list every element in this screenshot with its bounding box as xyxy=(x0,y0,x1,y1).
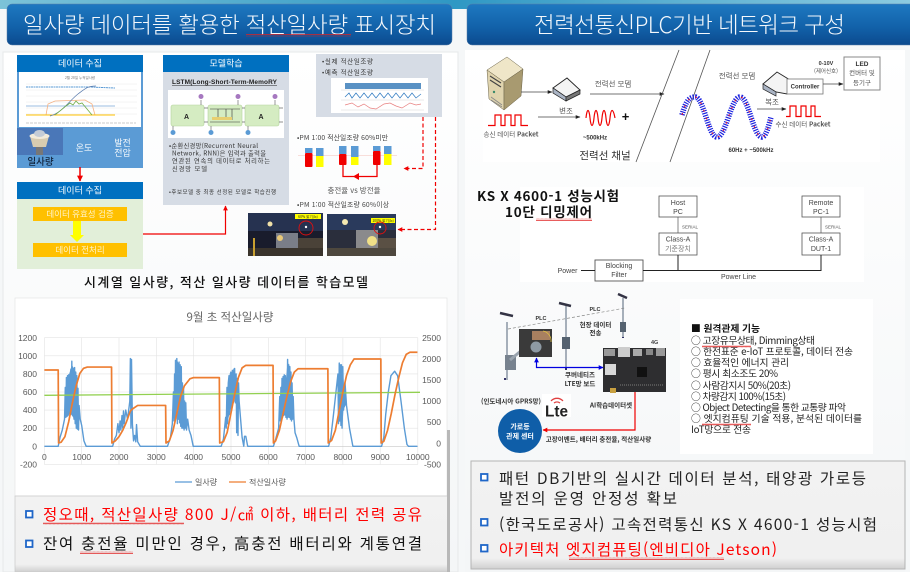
label: generation voltage: 발전 xyxy=(114,136,131,149)
label: power line: Power Line xyxy=(721,274,756,281)
x axis labels: 10000 xyxy=(406,452,430,462)
photo: controller box xyxy=(519,329,552,357)
series: irradiance dense band xyxy=(66,360,346,428)
label: kubernetes board: 쿠버네티즈 xyxy=(565,369,595,379)
icon: edge board xyxy=(603,347,666,393)
chart: early September cumulative irradiance xyxy=(15,298,447,496)
icon: receiver modem xyxy=(763,72,790,96)
title: right xyxy=(467,4,910,45)
left axis labels: 1000 xyxy=(18,351,37,361)
left axis labels: 1200 xyxy=(18,333,37,343)
box: blocking filter xyxy=(595,260,643,281)
box: controller xyxy=(787,79,823,94)
label: control signal: 0-10V xyxy=(819,61,834,67)
left axis labels: 0 xyxy=(32,442,37,452)
panel: actual and predicted: •예측 적산일조량 xyxy=(322,66,373,76)
photo: 60 percent brightness xyxy=(248,213,323,256)
label: receiver modem: 전력선 모뎀 xyxy=(719,70,755,82)
signal: send packet xyxy=(488,115,528,126)
box: reference device xyxy=(659,233,697,255)
box: device under test: Class-A xyxy=(809,236,834,244)
heading: performance test: KS X 4600-1 성능시험 xyxy=(477,185,619,205)
heading: performance test: 10단 디밍제어 xyxy=(505,201,592,221)
x axis labels: 9000 xyxy=(371,452,390,462)
right axis labels: 0 xyxy=(436,438,441,448)
box: remote pc: Remote xyxy=(809,200,833,207)
x axis labels: 5000 xyxy=(222,452,241,462)
legend xyxy=(175,477,286,488)
right axis labels: 2500 xyxy=(422,333,441,343)
label: send packet: 송신 데이터 Packet xyxy=(483,128,539,138)
x axis labels: 7000 xyxy=(296,452,315,462)
power line xyxy=(581,255,821,270)
panel: remote control functions: ○ 한전표준 e-IoT 프로토콜, 데이터 전송 xyxy=(691,344,853,358)
label: solar irradiance: 일사량 xyxy=(27,154,54,168)
diagram: PLC signal flow xyxy=(483,50,880,163)
bullet: realtime analysis: 패턴 DB기반의 실시간 데이터 분석, 태양광 가로등 xyxy=(499,467,866,489)
panel: model training: 모델학습 xyxy=(209,56,243,70)
x axis labels: 0 xyxy=(42,452,47,462)
left axis labels: 800 xyxy=(23,369,37,379)
labels: PLC links: PLC xyxy=(536,316,547,322)
right axis labels: 500 xyxy=(427,417,441,427)
x axis labels: 6000 xyxy=(259,452,278,462)
icon: server xyxy=(487,57,523,110)
label: events data: 고장이벤트, 배터리 충전율, 적산일사량 xyxy=(546,434,651,444)
box: LED driver: 등기구 xyxy=(853,77,871,87)
label: kubernetes board: LTE망 보드 xyxy=(565,378,595,388)
panel: remote control functions xyxy=(680,299,873,454)
text: RNN description: Network, RNN)은 입력과 출력을 xyxy=(172,148,266,158)
arrow: server to modem xyxy=(521,91,552,93)
icon: LTE logo: Lte xyxy=(545,404,568,420)
left axis labels xyxy=(18,333,37,470)
photo: 100 percent brightness: 100% 밝기(lx) xyxy=(372,218,394,224)
signal: receive packet xyxy=(786,106,821,116)
panel: remote control functions: ○ 엣지컴퓨팅 기술 적용, 분석된 데이터를 xyxy=(691,411,862,425)
label: power: Power xyxy=(558,268,578,275)
x axis labels: 3000 xyxy=(147,452,166,462)
box: reference device: Class-A xyxy=(666,236,691,244)
text: candidate model note: •후보모델 중 최종 선정된 모델로 학습진행 xyxy=(169,188,276,196)
panel: remote control functions: ○ 평시 최소조도 20% xyxy=(691,366,778,380)
icon: pyranometer sensor xyxy=(17,128,63,155)
bullet: low irradiance: 정오때, 적산일사량 800 J/㎠ 이하, 배터리 전력 공유 xyxy=(43,503,422,525)
panel: actual and predicted: •실제 적산일조량 xyxy=(322,56,373,66)
box: host pc: Host xyxy=(671,200,685,207)
label: sender modem: 전력선 모뎀 xyxy=(595,78,631,90)
label: powerline channel: 전력선 채널 xyxy=(579,148,631,163)
label: combined frequency: 60Hz + ~500kHz xyxy=(728,148,774,154)
series: cumulative irradiance xyxy=(44,352,417,443)
panel: model training xyxy=(163,55,289,205)
labels: PLC links xyxy=(536,307,611,337)
panel: data preprocessing: 데이터 수집 xyxy=(58,184,102,196)
photo: 60 percent brightness: 60% 밝기(lx) xyxy=(298,214,318,220)
label: control signal: (제어신호) xyxy=(814,67,838,75)
channel lines xyxy=(636,50,710,162)
right axis labels: -500 xyxy=(424,460,441,470)
label: AI dataset: AI학습데이터셋 xyxy=(589,400,632,410)
bullet: realtime analysis xyxy=(481,467,866,509)
left axis labels: 600 xyxy=(23,387,37,397)
box: data validation: 데이터 유효성 검증 xyxy=(46,208,114,220)
label: receive packet: 수신 데이터 Packet xyxy=(775,118,831,128)
label: kubernetes board xyxy=(565,369,595,388)
box: LED driver: LED xyxy=(856,61,869,68)
chart: daily data: 2월 28일 누적일사량 xyxy=(65,75,96,81)
serial links xyxy=(678,217,842,233)
panel: remote control functions: IoT망으로 전송 xyxy=(691,422,751,436)
text: over 60 percent condition: •PM 1:00 적산일조량 60%이상 xyxy=(297,199,389,209)
icon: control center xyxy=(498,409,542,453)
text: RNN description xyxy=(169,141,270,173)
heading: performance test xyxy=(477,185,619,221)
right axis labels: 1000 xyxy=(422,396,441,406)
chart: prediction xyxy=(331,78,428,113)
label: temperature: 온도 xyxy=(76,141,92,154)
box: data preprocessing: 데이터 전처리 xyxy=(55,244,105,256)
panel: actual and predicted xyxy=(316,54,442,117)
labels: PLC links: PLC xyxy=(590,307,601,313)
icon: control center: 관제 센터 xyxy=(506,432,534,442)
box: host pc xyxy=(659,196,697,217)
x axis labels: 4000 xyxy=(184,452,203,462)
label: demodulation: 복조 xyxy=(765,96,779,108)
arrow: modulation xyxy=(538,116,580,118)
right axis labels: 2000 xyxy=(422,354,441,364)
arrow: dashed to photos xyxy=(398,117,436,230)
arrow: controller to LED xyxy=(823,83,843,85)
serial links: SERIAL xyxy=(825,224,842,230)
arrow: board to controller xyxy=(536,358,603,368)
photo: 100 percent brightness xyxy=(327,214,396,256)
text: RNN description: 신경망 모델 xyxy=(172,164,207,173)
x axis labels xyxy=(42,452,430,462)
diagram: LSTM cells: A xyxy=(184,114,189,121)
panel: remote control functions: ○ 효율적인 에너지 관리 xyxy=(691,355,789,369)
title: right: 전력선통신PLC기반 네트워크 구성 xyxy=(534,8,845,40)
box: host pc: PC xyxy=(673,209,683,216)
diagram: LSTM cells xyxy=(168,90,284,138)
label: carrier frequency: ~500kHz xyxy=(583,136,607,142)
label: control signal xyxy=(814,61,838,75)
panel: remote control functions: ○ Object Detecting을 통한 교통량 파악 xyxy=(691,400,846,414)
heading: LSTM: LSTM(Long-Short-Term-MemoRY xyxy=(172,79,278,86)
panel: remote control functions: ■ 원격관제 기능 xyxy=(691,321,760,335)
box: device under test xyxy=(802,233,840,255)
caption: training model: 시계열 일사량, 적산 일사량 데이터를 학습모델 xyxy=(84,272,368,291)
panel: right findings xyxy=(471,461,905,569)
label: charge vs discharge: 충전율 vs 방전율 xyxy=(327,185,381,196)
panel: remote control functions: ○ 사람감지시 50%(20초) xyxy=(691,378,791,392)
left axis labels: 400 xyxy=(23,405,37,415)
icon: sender modem xyxy=(553,78,580,101)
arrow: board to control center xyxy=(543,392,635,430)
box: remote pc xyxy=(802,196,840,217)
signal: carrier wave xyxy=(586,110,615,126)
arrow: yellow down xyxy=(70,221,84,242)
box: device under test: DUT-1 xyxy=(811,246,831,253)
serial links: SERIAL xyxy=(682,224,699,230)
signal: combined wave xyxy=(682,97,771,137)
box: remote pc: PC-1 xyxy=(813,209,829,216)
box: LED driver xyxy=(844,57,880,90)
labels: PLC links: 전송 xyxy=(590,327,601,337)
legend: 일사량 xyxy=(195,477,218,488)
arrow: dashed to battery bars xyxy=(404,117,423,168)
right axis labels: 1500 xyxy=(422,375,441,385)
labels: PLC links: 현장 데이터 xyxy=(580,319,611,329)
series: irradiance xyxy=(44,359,417,446)
label: plus: + xyxy=(622,109,630,124)
panel: data collection xyxy=(17,55,143,168)
diagram: KS X 4600-1 test setup xyxy=(520,187,864,282)
legend: 적산일사량 xyxy=(249,477,286,488)
text: under 60 percent condition: •PM 1:00 적산일조량 60%미만 xyxy=(297,132,388,142)
arrow: preprocessing to model xyxy=(143,206,226,234)
arrow: modem to channel xyxy=(590,93,664,95)
box: LED driver: 컨버터 및 xyxy=(849,67,875,77)
bullet: performance test: (한국도로공사) 고속전력통신 KS X 4600-1 성능시험 xyxy=(499,513,877,535)
panel: data collection: 데이터 수집 xyxy=(58,56,102,70)
panel: data preprocessing xyxy=(17,182,143,269)
label: generation voltage: 전압 xyxy=(114,146,131,159)
panel: left findings xyxy=(15,430,450,572)
x axis labels: 2000 xyxy=(110,452,129,462)
box: blocking filter: Blocking xyxy=(606,263,632,270)
text: RNN description: •순환신경망(Recurrent Neural xyxy=(169,141,258,150)
box: reference device: 기준장치 xyxy=(665,244,691,254)
arrow: collection to preprocessing xyxy=(79,167,81,181)
x axis labels: 1000 xyxy=(72,452,91,462)
arrow: demodulation xyxy=(757,108,786,110)
left axis labels: 200 xyxy=(23,423,37,433)
label: GPRS network: (인도네시아 GPRS망) xyxy=(481,396,541,406)
icon: control center: 가로등 xyxy=(510,422,530,432)
series: target line xyxy=(44,392,420,395)
text: RNN description: 연관된 연속의 데이터로 처리하는 xyxy=(172,156,270,165)
chart: charge and discharge bars xyxy=(298,146,397,180)
bullet: realtime analysis: 발전의 운영 안정성 확보 xyxy=(499,487,677,509)
label: modulation: 변조 xyxy=(559,106,573,116)
diagram: LSTM cells: A xyxy=(258,114,264,121)
icon: LTE logo xyxy=(542,394,571,420)
box: blocking filter: Filter xyxy=(611,272,627,279)
x axis labels: 8000 xyxy=(333,452,353,462)
title: left: 일사량 데이터를 활용한 적산일사량 표시장치 xyxy=(23,8,436,40)
chart title: 9월 초 적산일사량 xyxy=(187,309,274,325)
panel: remote control functions: ○ 고장유무상태, Dimming상태 xyxy=(691,333,815,347)
label: 4G: 4G xyxy=(651,340,658,346)
panel: remote control functions: ○ 차량감지 100%(15초) xyxy=(691,389,786,403)
bullet: edge computing: 아키텍처 엣지컴퓨팅(엔비디아 Jetson) xyxy=(499,538,777,560)
bullet: grid link: 잔여 충전율 미만인 경우, 高충전 배터리와 계통연결 xyxy=(43,532,422,554)
diagram: remote control network xyxy=(481,294,666,453)
left axis labels: -200 xyxy=(20,460,37,470)
box: controller: Controller xyxy=(791,84,820,90)
icon: streetlight poles xyxy=(500,294,627,380)
right axis labels xyxy=(422,333,441,470)
grid and axis xyxy=(44,338,418,464)
